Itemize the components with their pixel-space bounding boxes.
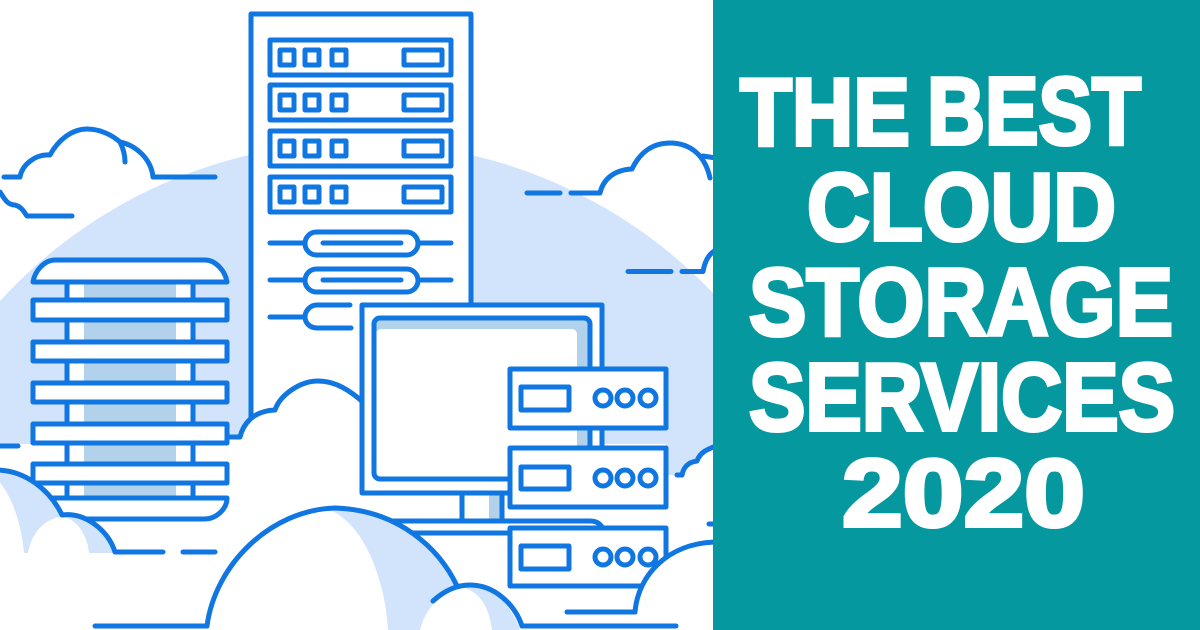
tower pills xyxy=(270,232,451,328)
cloud: top right with dashes xyxy=(527,143,716,193)
teal panel xyxy=(713,0,1200,630)
rack: left xyxy=(33,260,227,519)
cloud outline: small right xyxy=(677,446,716,475)
cloud: mid right with dashes xyxy=(628,250,716,272)
title: BEST xyxy=(927,58,1141,165)
cloud: bottom right xyxy=(522,524,716,630)
cloud: bottom left xyxy=(0,468,218,554)
server box 3 xyxy=(510,528,666,586)
server box 2 xyxy=(510,448,666,507)
server tower xyxy=(248,12,474,418)
cloud: bottom centre xyxy=(92,506,524,630)
connector posts xyxy=(578,428,602,448)
monitor xyxy=(362,305,602,533)
server box 1 xyxy=(510,369,666,428)
title: THE xyxy=(740,59,910,166)
title xyxy=(740,58,1175,547)
drive slots xyxy=(270,40,451,212)
title: 2020 xyxy=(842,440,1085,547)
cloud: centre xyxy=(229,378,360,502)
cloud: small right xyxy=(684,450,713,475)
illustration: cloud servers xyxy=(0,14,716,630)
background dome xyxy=(0,142,713,475)
cloud: top left xyxy=(0,129,215,216)
dash: left xyxy=(0,444,18,448)
title: CLOUD xyxy=(807,154,1116,261)
